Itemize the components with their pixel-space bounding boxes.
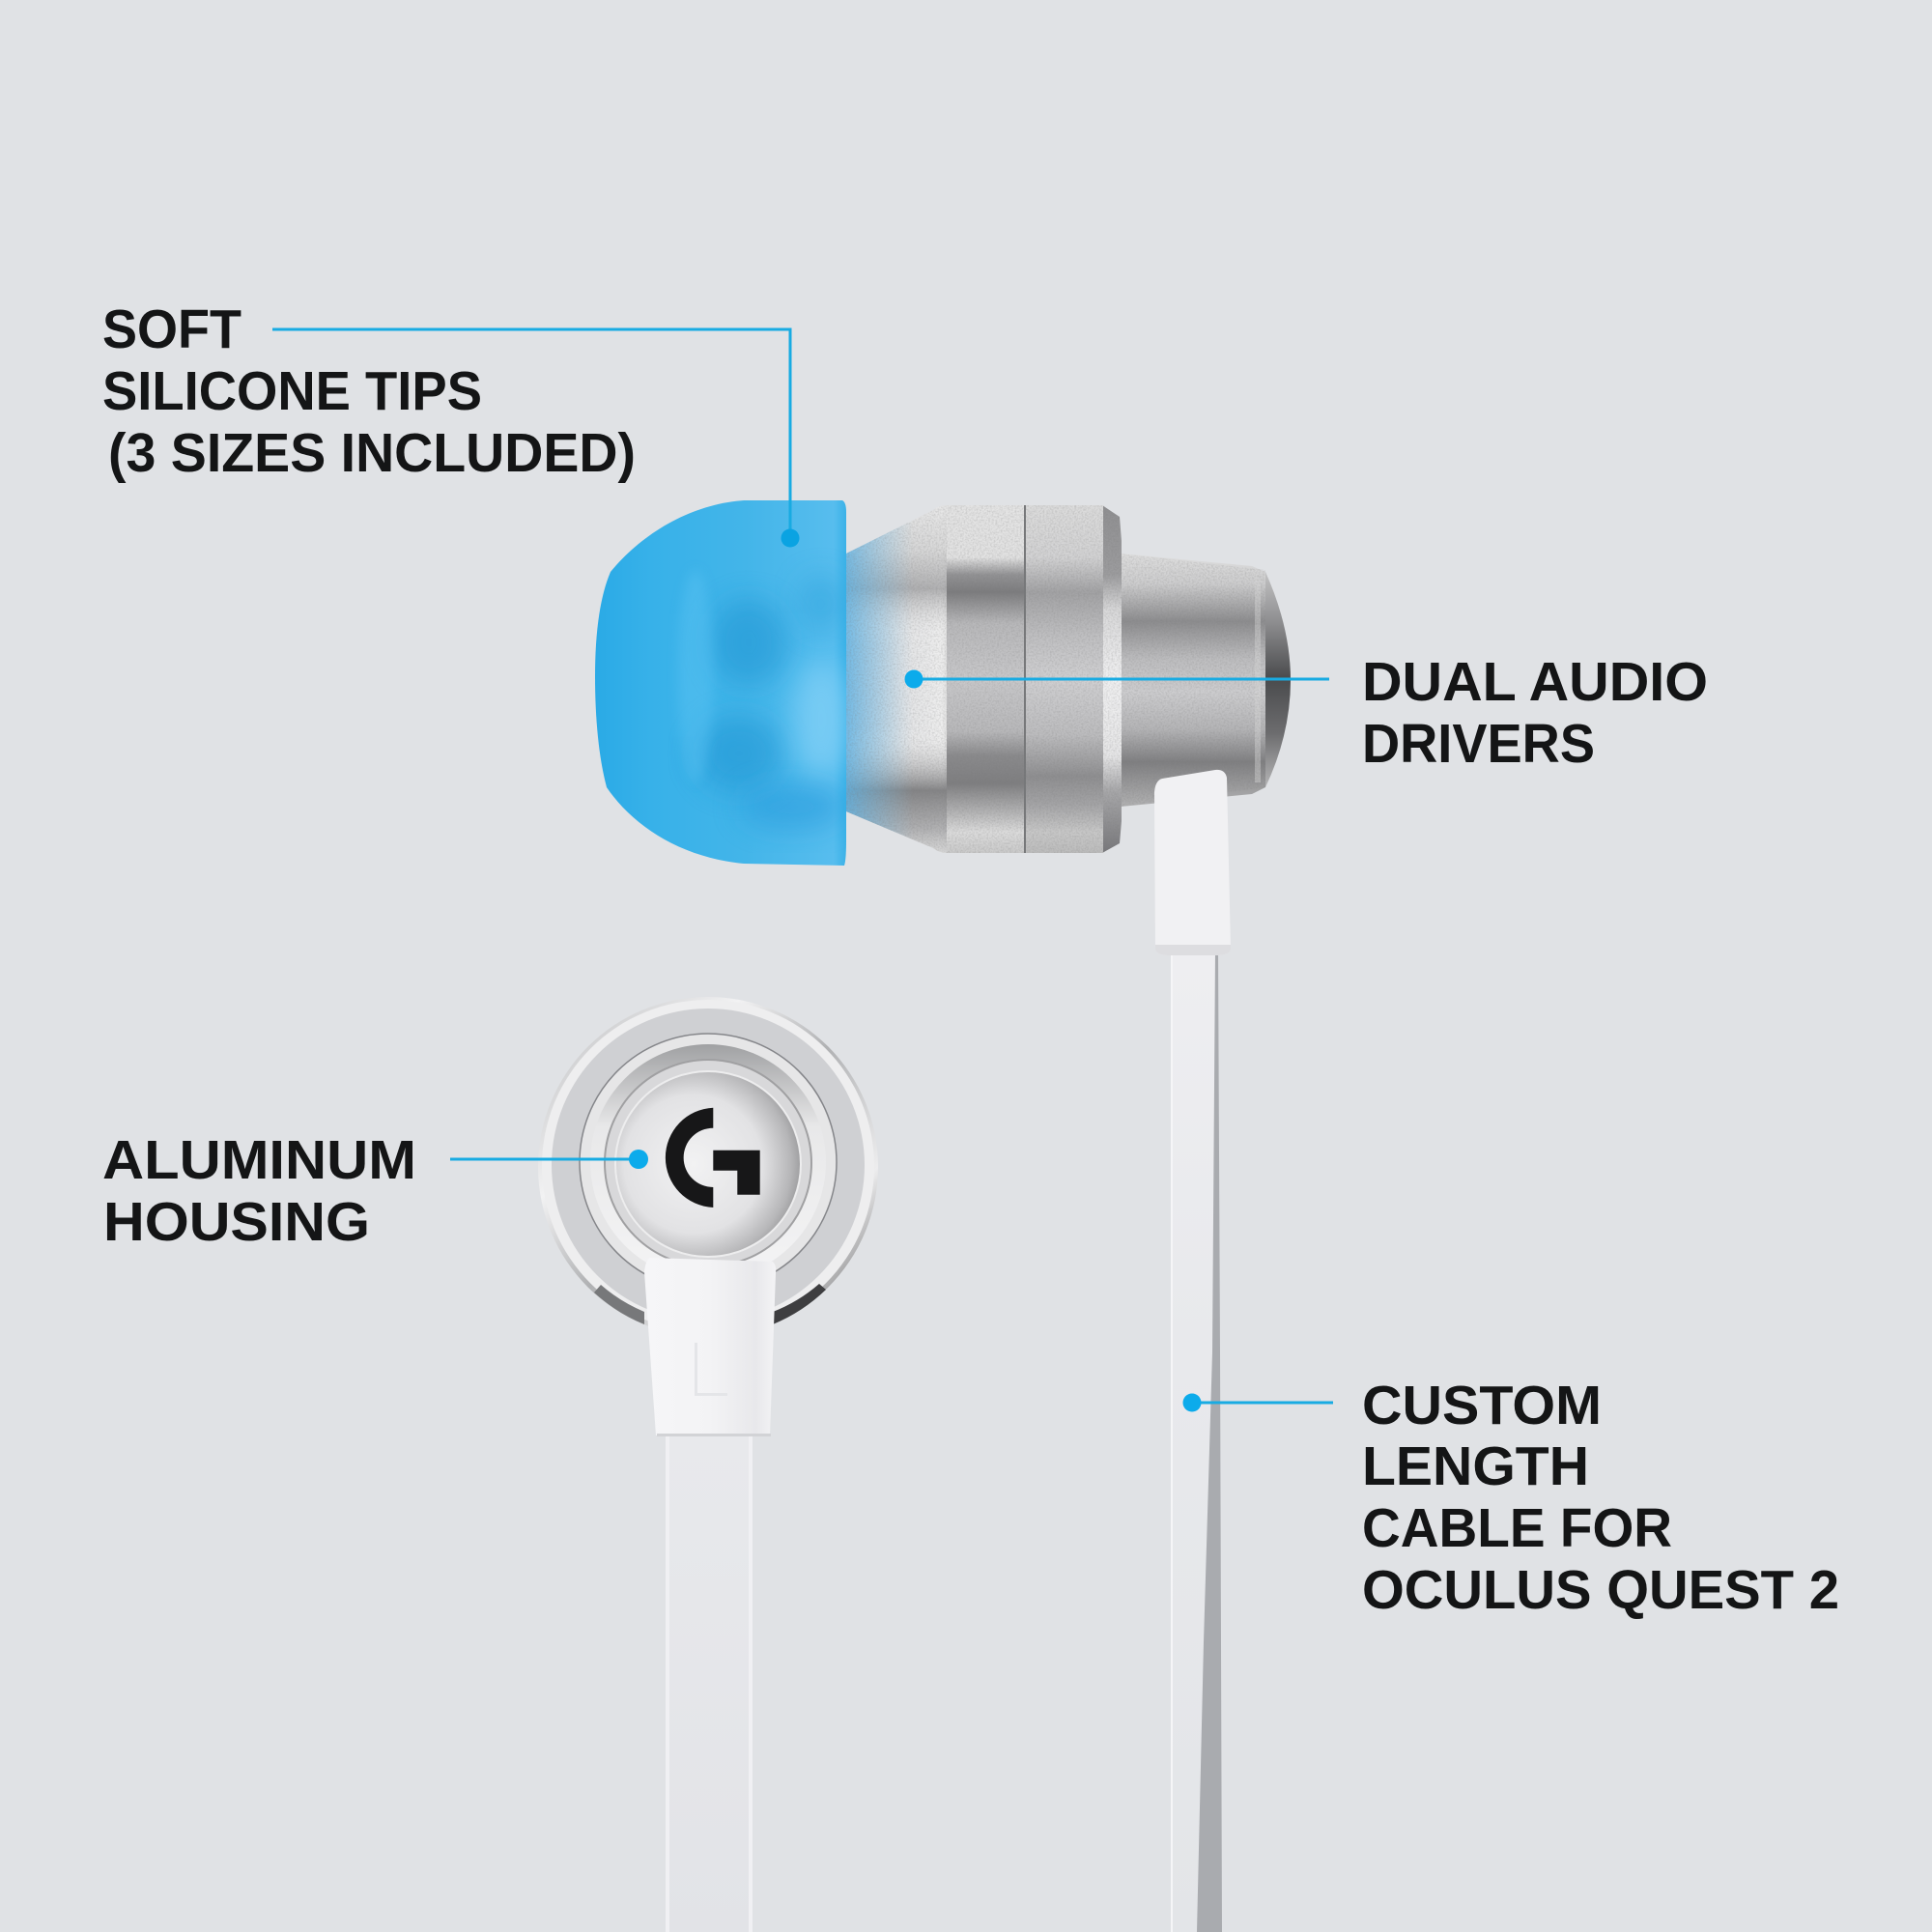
callout line and dot: silicone tips <box>272 329 800 547</box>
callout line and dot: cable <box>1182 1393 1333 1412</box>
earphone side view <box>595 493 1329 1932</box>
label: custom length cable: CABLE FOR <box>1362 1497 1672 1559</box>
infographic canvas <box>104 309 1837 1932</box>
outer aluminum rim <box>538 997 878 1337</box>
cone section <box>846 524 947 853</box>
callout line and dot: housing <box>450 1150 648 1169</box>
label: soft silicone tips: SOFT <box>102 298 242 360</box>
label: custom length cable: LENGTH <box>1362 1435 1589 1497</box>
callout line and dot: drivers <box>904 670 1329 688</box>
rear housing <box>1121 554 1291 807</box>
embossed L <box>695 1343 727 1396</box>
label: dual audio drivers <box>1362 651 1708 775</box>
label: soft silicone tips: SILICONE TIPS <box>102 360 482 422</box>
label: custom length cable: OCULUS QUEST 2 <box>1362 1559 1839 1621</box>
label: soft silicone tips <box>102 298 636 484</box>
label: dual audio drivers: DUAL AUDIO <box>1362 651 1708 713</box>
label: soft silicone tips: (3 SIZES INCLUDED) <box>108 422 636 484</box>
side cable connector <box>1154 770 1231 955</box>
label: custom length cable: CUSTOM <box>1362 1375 1602 1436</box>
earphone front view <box>450 997 878 1932</box>
icon: G logo <box>666 1108 760 1208</box>
cable: right flat cable <box>1171 952 1222 1932</box>
label: aluminum housing: HOUSING <box>103 1191 370 1253</box>
main barrel <box>945 505 1103 853</box>
label: aluminum housing: ALUMINUM <box>102 1129 416 1191</box>
cable: left flat cable <box>666 1435 753 1932</box>
metal grain <box>846 502 1271 856</box>
label: custom length cable <box>1362 1375 1839 1621</box>
front cable connector <box>644 1258 776 1436</box>
label: aluminum housing <box>102 1129 416 1253</box>
flange ring <box>1102 505 1122 853</box>
label: dual audio drivers: DRIVERS <box>1362 713 1595 775</box>
silicone ear tip <box>595 500 848 866</box>
inner metal rings <box>580 1034 837 1291</box>
